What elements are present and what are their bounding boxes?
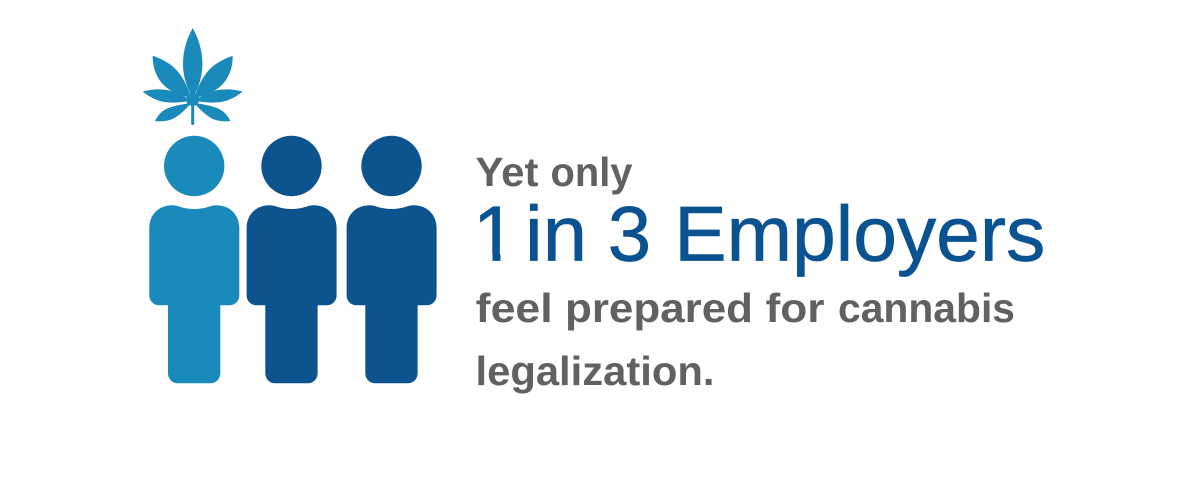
person 2 [247, 136, 337, 383]
person 1: highlighted [149, 136, 239, 383]
infographic [142, 28, 1043, 394]
heading: 1 in 3 Employers: 3 [608, 190, 651, 278]
text: feel prepared for cannabis: feel [476, 285, 553, 331]
heading: 1 in 3 Employers: 1 [473, 190, 516, 278]
text: feel prepared for cannabis: for [766, 285, 825, 331]
text: feel prepared for cannabis: prepared [565, 285, 753, 331]
icon: cannabis leaf [143, 28, 243, 125]
heading: 1 in 3 Employers: Employers [674, 190, 1045, 278]
person 3 [347, 136, 437, 383]
heading: 1 in 3 Employers [480, 204, 1043, 277]
text: legalization.: legalization. [476, 348, 714, 394]
text: feel prepared for cannabis [476, 285, 1015, 331]
text: feel prepared for cannabis: cannabis [838, 285, 1015, 331]
text: yet only: Yet [476, 149, 539, 195]
text: yet only: only [550, 149, 633, 195]
text: yet only [476, 149, 633, 195]
heading: 1 in 3 Employers: in [525, 190, 587, 278]
